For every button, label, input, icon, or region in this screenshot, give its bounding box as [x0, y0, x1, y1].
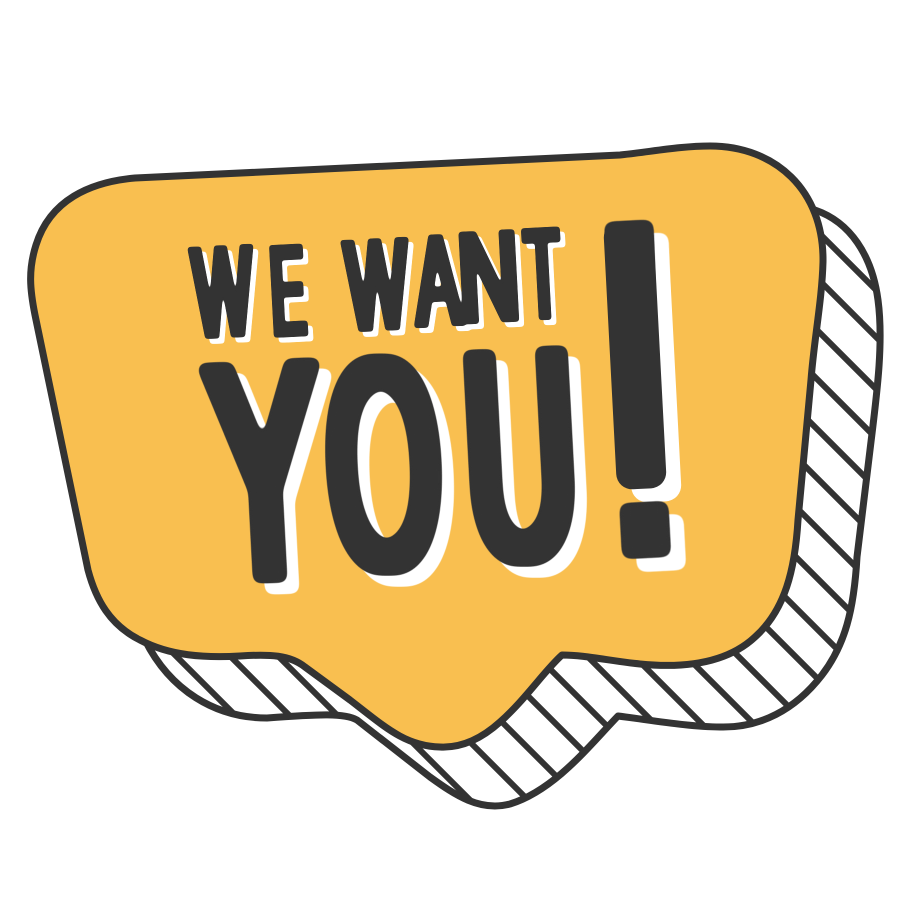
white drop shadow of headline: U: [469, 299, 596, 634]
white drop shadow of headline: !: [581, 104, 724, 679]
white drop shadow of headline: T: [527, 207, 568, 350]
white drop shadow of headline: W: [195, 226, 261, 369]
YOU line: O: [320, 297, 448, 632]
exclamation mark: !: [566, 91, 709, 666]
speech bubble infographic: [27, 142, 884, 810]
WE WANT line: E: [267, 220, 308, 362]
headline text: [190, 91, 724, 679]
YOU line: U: [457, 288, 584, 623]
WE WANT line: W: [343, 213, 411, 357]
hatched shadow bubble: [145, 210, 885, 810]
YOU line: [201, 288, 584, 643]
YOU line: Y: [201, 299, 328, 643]
exclamation bar shadow body: [618, 233, 682, 503]
WE WANT line: T: [522, 202, 563, 345]
main yellow speech bubble: [31, 146, 823, 747]
white drop shadow of headline: E: [272, 225, 313, 367]
white drop shadow of headline: W: [348, 218, 416, 362]
white drop shadow of headline: O: [332, 308, 460, 643]
WE WANT line: A: [412, 210, 463, 353]
WE WANT line: N: [455, 205, 523, 349]
exclamation bar body: [603, 220, 667, 490]
white drop shadow of headline: A: [417, 215, 468, 358]
WE WANT line: [190, 202, 563, 364]
WE WANT line: W: [190, 221, 256, 364]
white drop shadow of headline: [195, 104, 724, 679]
dark headline: WE WANT YOU!: [190, 91, 709, 666]
white drop shadow of headline: Y: [213, 310, 340, 654]
white drop shadow of headline: N: [460, 210, 528, 354]
